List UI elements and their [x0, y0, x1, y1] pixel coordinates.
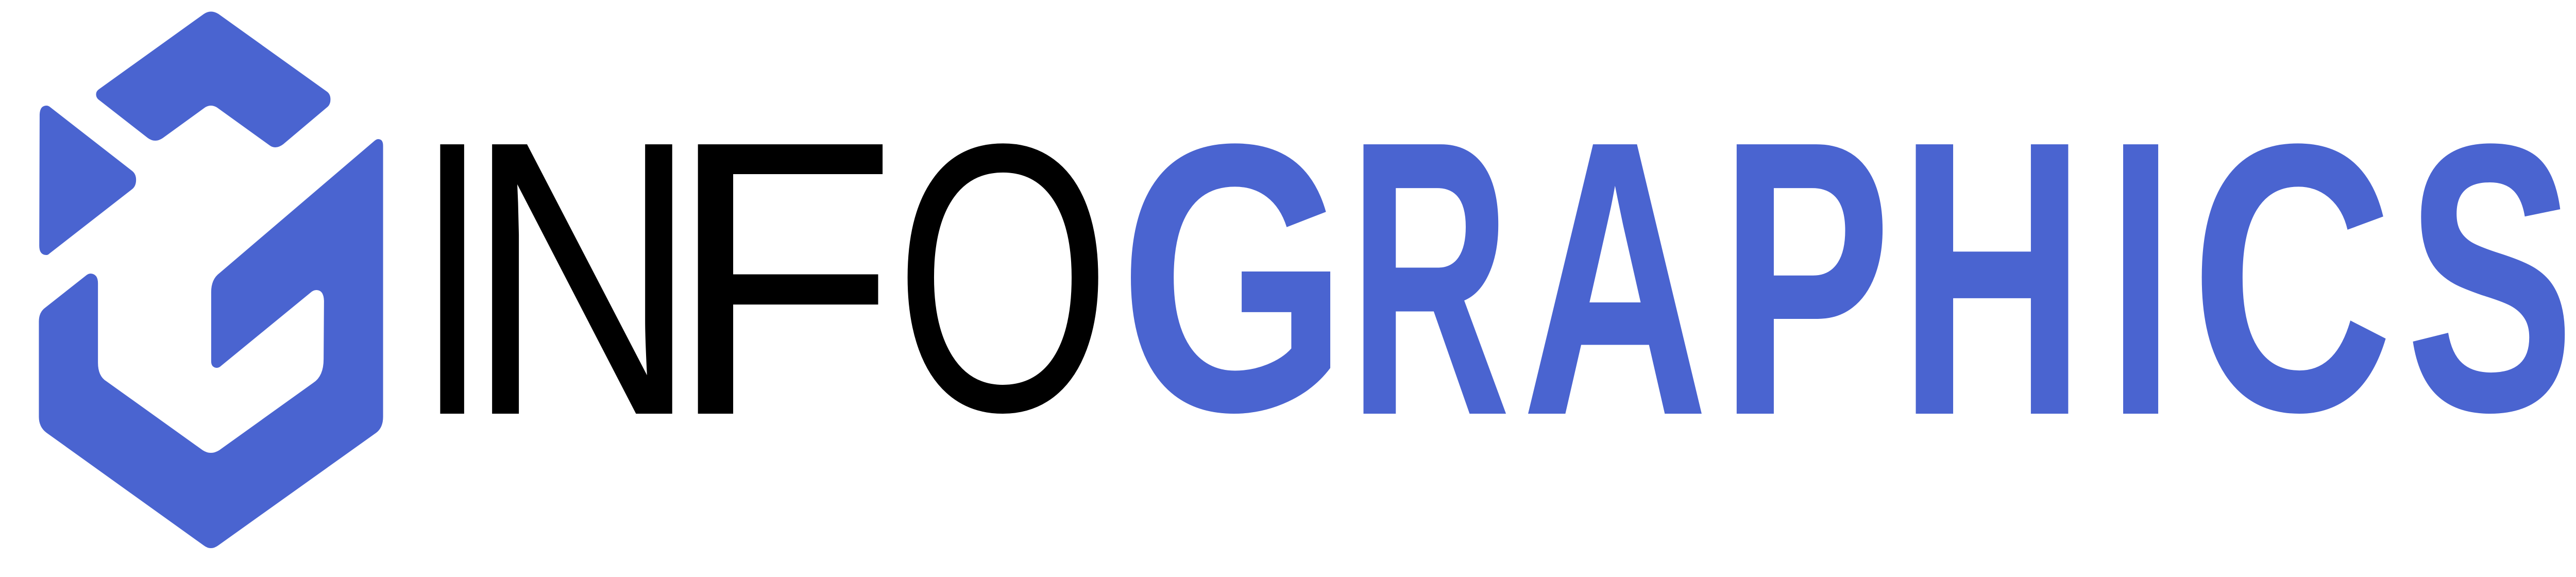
- logo left triangle: [39, 106, 136, 255]
- word part: INFO: I: [416, 60, 488, 497]
- wordmark: INFOGRAPHICS: [416, 59, 2574, 497]
- word part: GRAPHICS: A: [1522, 60, 1708, 497]
- word part: GRAPHICS: H: [1899, 60, 2086, 497]
- word part: GRAPHICS: C: [2190, 64, 2394, 491]
- word part: GRAPHICS: R: [1348, 60, 1511, 497]
- word part: INFO: F: [667, 60, 897, 497]
- logo bottom hexagon body: [39, 139, 383, 548]
- icon: hexagon logo: [39, 11, 383, 548]
- word part: GRAPHICS: P: [1719, 60, 1891, 497]
- word part: GRAPHICS: I: [2107, 60, 2175, 497]
- word part: INFO: N: [466, 59, 699, 497]
- word part: INFO: [416, 59, 1112, 497]
- word part: GRAPHICS: [1119, 60, 2574, 497]
- word part: GRAPHICS: S: [2405, 65, 2574, 491]
- word part: INFO: O: [894, 64, 1112, 491]
- word part: GRAPHICS: G: [1119, 65, 1349, 491]
- logo top chevron: [96, 11, 330, 147]
